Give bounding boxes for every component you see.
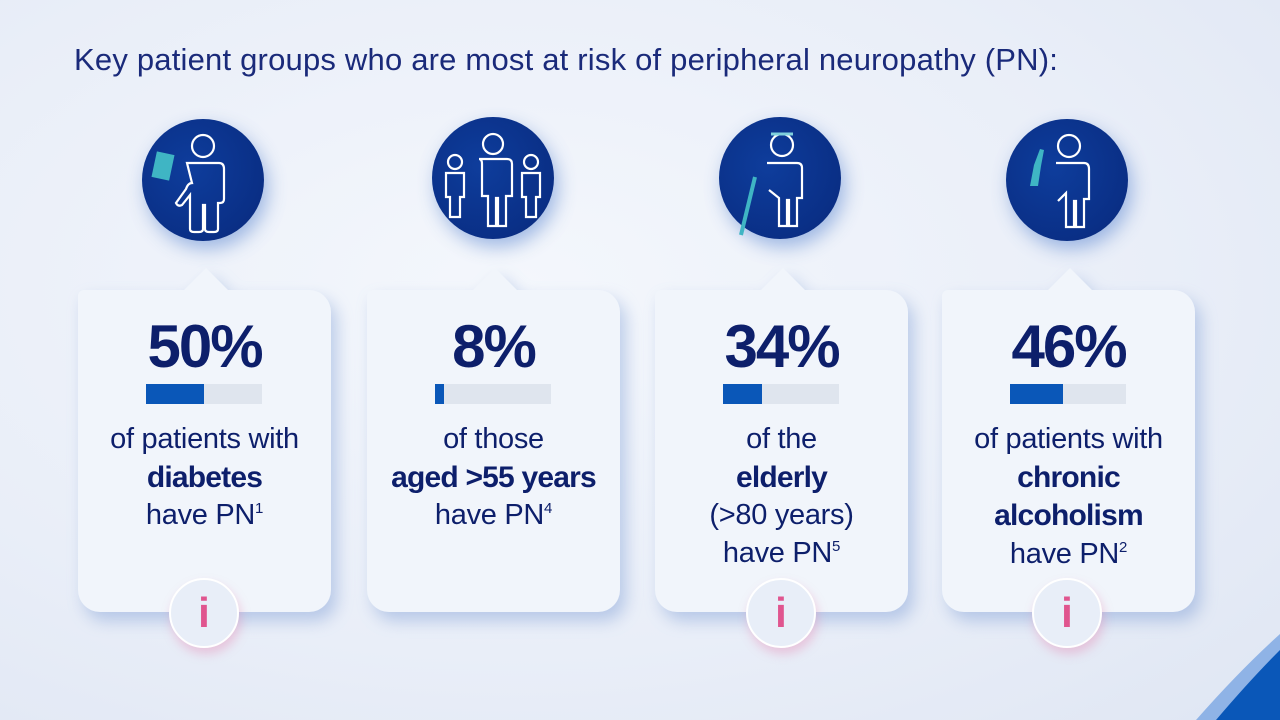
text: (>80 years) [709,499,854,531]
stat: 46% [1011,313,1126,380]
corner swoosh [1196,634,1280,720]
icon: info 1: i [198,589,210,636]
text: elderly [736,460,827,494]
icon: elderly with cane [719,117,841,239]
panel: aged >55 [364,274,634,628]
icon: info 1 [169,578,239,648]
stat: 34% [724,313,839,380]
stat: 50% [147,313,262,380]
text [110,423,299,531]
icon: info 3: i [775,589,787,636]
text [709,423,854,568]
stat: 8% [452,313,535,380]
icon: family [432,117,554,239]
icon: info 4: i [1061,589,1073,636]
bar [146,384,262,404]
bar [435,384,551,404]
text: of patients with [974,423,1163,455]
text: have PN1 [146,499,263,531]
text [391,423,596,531]
text: of those [443,423,544,455]
panel: diabetes [76,274,346,628]
text: chronic [1017,460,1120,494]
bar [1010,384,1126,404]
icon: info 3 [746,578,816,648]
icon: person with chocolate [142,119,264,241]
text: have PN5 [723,536,840,568]
bar [723,384,839,404]
text: diabetes [147,460,262,494]
panel: elderly [652,274,922,628]
text: have PN4 [435,499,552,531]
icon: info 4 [1032,578,1102,648]
text: have PN2 [1010,538,1127,570]
icon: person with bottle [1006,119,1128,241]
text: aged >55 years [391,460,596,494]
text: of patients with [110,423,299,455]
panel: alcoholism [940,274,1208,628]
text: of the [746,423,817,455]
text [974,423,1163,570]
text: alcoholism [994,499,1143,532]
title: Key patient groups who are most at risk of peripheral neuropathy (PN): [74,42,1058,77]
